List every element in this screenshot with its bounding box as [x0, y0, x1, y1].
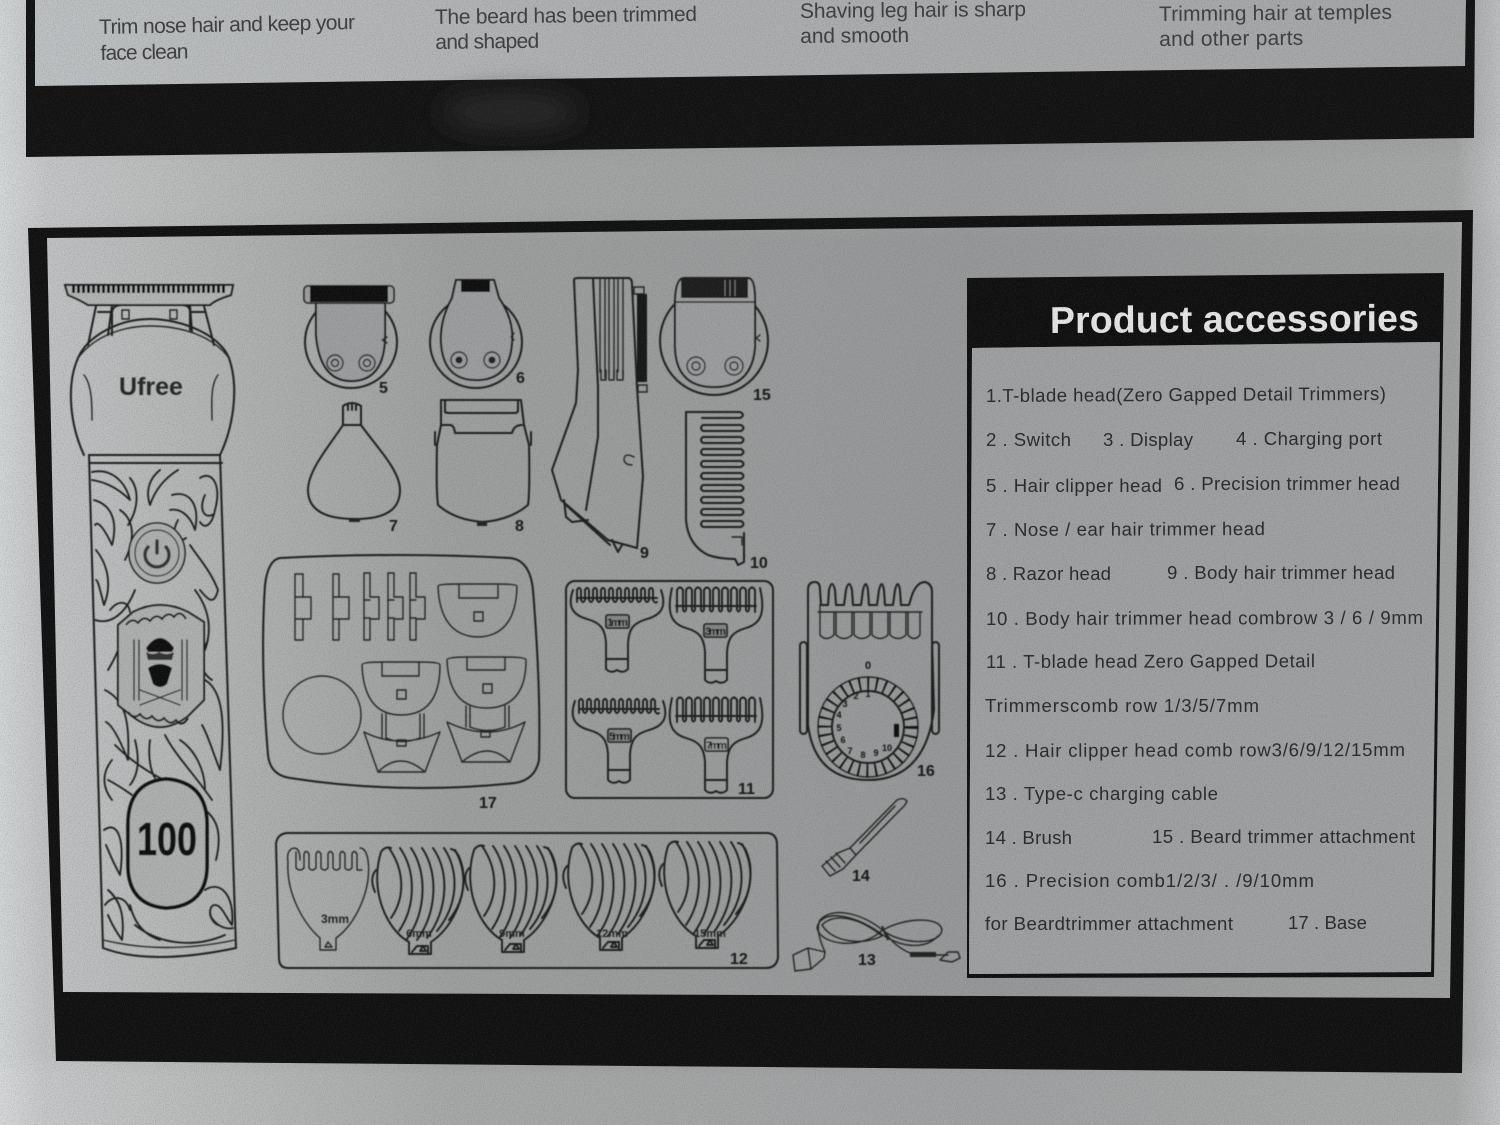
LCD display [128, 779, 207, 908]
accessories text lines: 14 . Brush [985, 827, 1072, 848]
caption: nose hair: Trim nose hair and keep your [99, 11, 355, 39]
illustration: precision comb 16: 1 [865, 689, 871, 699]
illustration: T-blade combs 11: 7mm [706, 740, 727, 752]
illustration: precision comb 16: 3 [842, 699, 848, 709]
accessories text lines: 10 . Body hair trimmer head combrow 3 / 6 / 9mm [986, 607, 1423, 629]
illustration: precision comb 16: 5 [836, 723, 842, 733]
3mm comb [288, 848, 369, 950]
illustration: guide combs 12: 12 [730, 951, 748, 968]
illustration: precision comb 16: 16 [917, 763, 935, 780]
power button [129, 523, 185, 583]
illustration: guide combs 12: 9mm [499, 928, 525, 940]
illustration: precision comb 16 [800, 582, 939, 780]
illustration: precision trimmer head 6: 6 [516, 370, 525, 387]
body [89, 455, 236, 957]
accessories text lines: 13 . Type-c charging cable [985, 783, 1218, 804]
accessories text lines: for Beardtrimmer attachment [985, 913, 1234, 934]
illustration: precision comb 16: 9 [873, 748, 879, 758]
illustration: T-blade combs 11: 5mm [609, 731, 630, 743]
accessories text lines: 15 . Beard trimmer attachment [1152, 826, 1416, 847]
illustration: charging cable 13 [793, 913, 960, 971]
illustration: charging cable 13: 13 [858, 952, 876, 969]
illustration: guide combs 12: 15mm [694, 928, 726, 940]
illustration: base tray 17 [263, 555, 539, 812]
illustration: body hair comb 10 [686, 412, 768, 572]
black band: upper panel frame [26, 0, 1475, 157]
illustration: T-blade combs 11: 3mm [705, 626, 726, 638]
LCD display: 100 [137, 813, 197, 865]
illustration: precision comb 16: 6 [840, 735, 846, 745]
caption: leg hair [800, 0, 1026, 48]
illustration: T-blade combs 11 [566, 581, 773, 798]
illustration: hair clipper head 5 [304, 286, 397, 397]
caption: temples: and other parts [1159, 27, 1303, 51]
badge with barber portrait [118, 605, 204, 727]
accessories text lines: 8 . Razor head [986, 563, 1111, 584]
accessories text lines: Trimmerscomb row 1/3/5/7mm [985, 695, 1259, 716]
product illustrations [65, 278, 960, 971]
accessories text lines: 9 . Body hair trimmer head [1167, 562, 1395, 583]
foot strip [0, 1055, 1500, 1125]
illustration: trimmer 1-4 [65, 285, 236, 957]
accessories text lines: 2 . Switch [986, 429, 1071, 450]
text: usage captions [99, 0, 1392, 65]
panel: product accessories list [967, 273, 1444, 978]
black frame: product panel [28, 210, 1473, 1073]
illustration: nose and ear head 7 [308, 403, 400, 535]
worn print patch on upper band [440, 96, 580, 128]
accessories text lines: 1.T-blade head(Zero Gapped Detail Trimmers) [986, 383, 1386, 406]
accessories text lines: 12 . Hair clipper head comb row3/6/9/12/15mm [985, 739, 1405, 761]
accessories text lines: 4 . Charging port [1236, 428, 1383, 449]
caption: nose hair: face clean [100, 40, 189, 65]
illustration: guide combs 12: 12mm [596, 928, 628, 940]
panel: upper usage panel fill [30, 0, 1470, 90]
illustration: brush 14: 14 [852, 868, 870, 885]
illustration: base tray 17: 17 [479, 795, 497, 812]
illustration: precision comb 16: 2 [853, 691, 859, 701]
caption: nose hair [99, 11, 356, 65]
illustration: T-blade combs 11: 1mm [607, 617, 628, 629]
illustration: precision comb 16: 4 [836, 710, 842, 720]
illustration: razor head 8: 8 [515, 518, 524, 535]
caption: temples: Trimming hair at temples [1159, 1, 1392, 26]
illustration: precision trimmer head 6 [430, 280, 525, 388]
slots [295, 573, 425, 640]
list box [967, 273, 1444, 978]
accessories text lines: 5 . Hair clipper head [986, 475, 1162, 496]
heading: Product accessories [1050, 297, 1419, 341]
caption: beard: and shaped [435, 30, 539, 54]
illustration: precision comb 16: 10 [882, 743, 892, 753]
illustration: body hair comb 10: 10 [750, 555, 768, 572]
illustration: precision comb 16: 7 [847, 746, 853, 756]
dome [71, 319, 234, 455]
caption: beard: The beard has been trimmed [435, 3, 697, 29]
brand name: Ufree [119, 373, 183, 401]
floral engraving [92, 470, 233, 943]
accessories text lines [985, 383, 1423, 934]
accessories text lines: 16 . Precision comb1/2/3/ . /9/10mm [985, 870, 1314, 891]
illustration: brush 14 [822, 799, 907, 885]
illustration: beard trimmer attachment 15: 15 [753, 387, 771, 404]
accessories text lines: 3 . Display [1103, 429, 1194, 450]
caption: leg hair: and smooth [800, 24, 909, 48]
accessories text lines: 6 . Precision trimmer head [1174, 473, 1400, 494]
illustration: T-blade combs 11: 11 [738, 781, 755, 798]
3mm comb: 3mm [321, 912, 349, 926]
accessories text lines: 11 . T-blade head Zero Gapped Detail [986, 650, 1315, 672]
illustration: hair clipper head 5: 5 [379, 380, 388, 397]
illustration: precision comb 16: 0 [865, 660, 871, 672]
illustration: guide combs 12: 6mm [406, 928, 432, 940]
illustration: body hair trimmer head 9 [552, 278, 649, 562]
blade teeth [65, 285, 233, 305]
caption: temples [1159, 1, 1392, 51]
illustration: precision comb 16: 8 [860, 750, 866, 760]
illustration: nose and ear head 7: 7 [389, 518, 398, 535]
illustration: body hair trimmer head 9: 9 [640, 545, 649, 562]
accessories text lines: 7 . Nose / ear hair trimmer head [986, 518, 1265, 540]
caption: beard [435, 3, 697, 54]
band between panels [0, 130, 1500, 240]
accessories text lines: 17 . Base [1288, 912, 1367, 933]
illustration: beard trimmer attachment 15 [660, 278, 771, 404]
illustration: guide combs 12 [276, 833, 778, 968]
illustration: razor head 8 [435, 400, 531, 535]
